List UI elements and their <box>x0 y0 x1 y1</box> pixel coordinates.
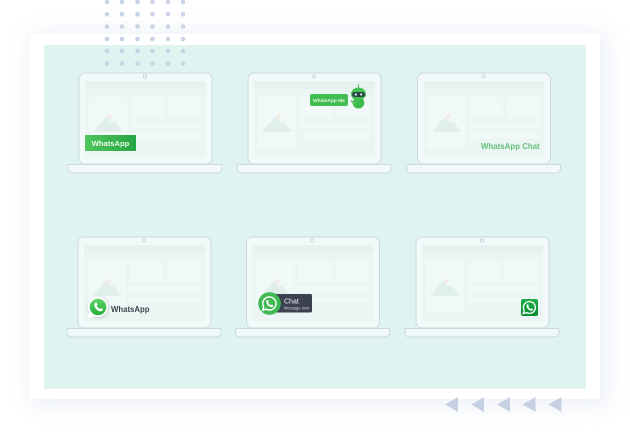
icon: green robot <box>350 84 366 108</box>
teal panel <box>44 45 586 389</box>
arrows: left-pointing triangles <box>445 397 562 412</box>
laptop 1: green rectangular WhatsApp button <box>68 73 222 173</box>
text: WhatsApp Chat: WhatsApp Chat <box>481 142 540 151</box>
laptop 2: chatbot with button <box>237 73 391 173</box>
card shadow <box>30 32 608 406</box>
button: WhatsApp Me <box>310 94 348 106</box>
laptop 6: green square icon <box>405 237 559 337</box>
icon: WhatsApp square <box>521 299 538 316</box>
dot grid <box>105 0 185 66</box>
dark label <box>270 294 312 312</box>
white card <box>30 34 600 399</box>
dark label: Message now <box>284 306 309 310</box>
icon: WhatsApp circle <box>258 292 281 315</box>
icon: WhatsApp round <box>88 297 109 318</box>
label: WhatsApp: WhatsApp <box>111 305 150 314</box>
laptop 5: round icon with dark chat label <box>236 237 390 337</box>
button: WhatsApp <box>85 135 136 151</box>
dark label: Chat <box>284 298 299 306</box>
laptop 4: round icon with label <box>67 237 221 337</box>
laptop 3: green text link <box>406 73 560 173</box>
button: WhatsApp: WhatsApp <box>92 139 130 148</box>
button: WhatsApp Me: WhatsApp Me <box>313 98 345 104</box>
